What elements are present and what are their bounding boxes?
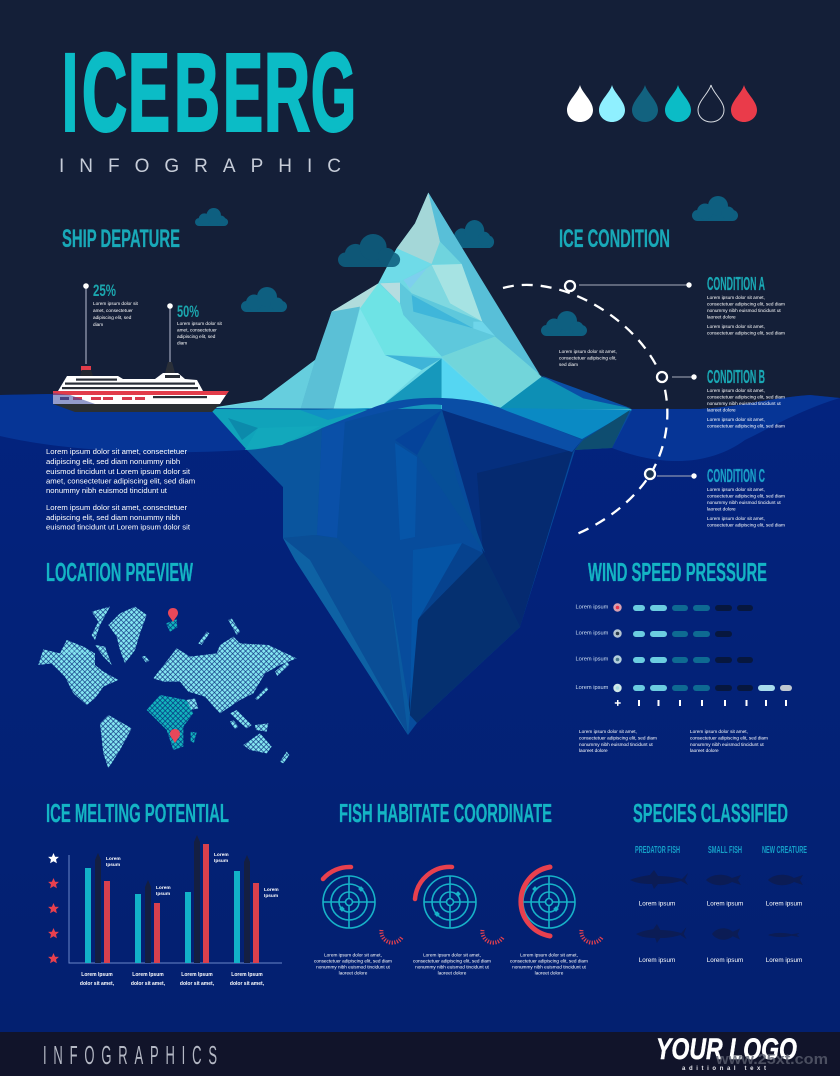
title: R [264,32,310,154]
column headings [635,845,807,856]
title: G [311,32,356,154]
bar group 4 [234,855,279,963]
x-axis labels: dolor sit amet, [80,981,115,987]
condition B: laoreet dolore [707,408,736,412]
radar 3 [510,867,602,976]
title: B [174,32,220,154]
fish labels: Lorem ipsum [639,900,675,908]
bar group 3: Lorem [214,852,229,858]
fish labels: Lorem ipsum [766,900,802,908]
icon: map pin north [168,608,178,622]
callout: 25%: amet, consectetuer [93,308,133,313]
bar group 2: Ipsum [156,891,170,897]
radar 1: consectetuer adipiscing elit, sed diam [314,958,392,964]
title: I [62,32,78,154]
condition B: nonummy nibh euismod tincidunt ut [707,401,781,406]
radar 3: nonummy nibh euismod tincidunt ut [512,964,587,970]
text block: left body copy: adipiscing elit, sed diam nonummy nibh [46,457,180,466]
condition A: Lorem ipsum dolor sit amet, [707,295,765,300]
footer bar [0,1032,840,1076]
text block: left body copy: Lorem ipsum dolor sit amet, consectetuer [46,503,187,512]
callout: 50%: amet, consectetuer [177,328,217,332]
clouds [195,196,738,336]
condition B: consectetuer adipiscing elit, sed diam [707,424,785,428]
heading: fish habitate coordinate: FISH HABITATE COORDINATE [339,798,552,828]
condition A: consectetuer adipiscing elit, sed diam [707,330,785,336]
dashed route with condition markers [503,281,697,536]
row 1: Lorem ipsum [576,604,609,610]
radar 3: Lorem ipsum dolor sit amet, [520,952,578,958]
radar 1 [314,867,402,976]
bar group 2 [135,880,171,963]
text block: wind note 1: nonummy nibh euismod tincidunt ut [579,742,653,747]
axis ticks [615,700,787,706]
x-axis labels: dolor sit amet, [230,981,265,987]
bar group 4: Lorem [264,887,279,893]
title: E [128,32,170,154]
condition A: Lorem ipsum dolor sit amet, [707,324,765,329]
condition A: CONDITION A [707,274,765,294]
subtitle: INFOGRAPHIC [59,156,341,177]
row 2 [576,629,732,638]
iceberg waterline facets [210,398,632,452]
world map [38,607,297,768]
bar group 4: Ipsum [264,893,278,899]
fish labels: Lorem ipsum [766,957,802,964]
heading: ice melting potential: ICE MELTING POTENTIAL [46,798,229,828]
bar group 3 [185,835,229,963]
title: E [223,32,263,154]
callout: 50%: adipiscing elit, sed [177,334,216,339]
bar chart: ice melting [48,835,282,987]
x-axis labels: Lorem Ipsum [181,972,213,978]
fish silhouettes [630,870,803,943]
x-axis labels: Lorem Ipsum [81,972,113,978]
text block: wind note 2: laoreet dolore [690,748,719,753]
condition C: Lorem ipsum dolor sit amet, [707,516,765,521]
condition A: laoreet dolore [707,314,736,320]
row 4 [576,684,792,692]
radar 2: nonummy nibh euismod tincidunt ut [415,964,490,970]
condition C: consectetuer adipiscing elit, sed diam [707,522,785,528]
condition C: nonummy nibh euismod tincidunt ut [707,500,781,505]
iceberg above water [210,193,632,410]
title: C [82,32,127,154]
watermark: www.25xt.com [715,1051,828,1068]
x-axis labels: Lorem Ipsum [231,972,263,978]
radar 1: laoreet dolore [339,970,368,976]
star scale [48,853,59,963]
text block: iceberg note: consectetuer adipiscing elit, [559,356,617,360]
condition A [707,274,785,336]
callout: 25%: Lorem ipsum dolor sit [93,301,139,306]
heading: ice condition: ICE CONDITION [559,225,670,253]
fish labels: Lorem ipsum [707,957,743,964]
radar 2: consectetuer adipiscing elit, sed diam [413,958,491,964]
text block: wind note 1: consectetuer adipiscing elit, sed diam [579,736,657,740]
footer title: INFOGRAPHICS [43,1041,217,1070]
row 1 [576,603,753,612]
callout: 50% [167,302,223,364]
condition B: consectetuer adipiscing elit, sed diam [707,394,785,400]
column headings: PREDATOR FISH [635,845,680,856]
callout: 25%: adipiscing elit, sed [93,315,132,320]
condition A: consectetuer adipiscing elit, sed diam [707,302,785,306]
radar 3: consectetuer adipiscing elit, sed diam [510,958,588,964]
condition A: nonummy nibh euismod tincidunt ut [707,308,781,313]
heading: ship departure: SHIP DEPATURE [62,225,180,253]
text block: wind note 1: laoreet dolore [579,748,608,753]
callout: 25%: 25% [93,281,116,300]
condition C [707,466,785,528]
column headings: SMALL FISH [708,845,742,856]
radar 1: nonummy nibh euismod tincidunt ut [316,964,391,970]
text block: left body copy: nonummy nibh euismod tincidunt ut [46,486,168,495]
callout: 50%: Lorem ipsum dolor sit [177,321,223,326]
ship with callouts [53,281,229,412]
wind speed chart [576,603,792,753]
row 4: Lorem ipsum [576,685,609,691]
condition B: Lorem ipsum dolor sit amet, [707,388,765,393]
iceberg below water [210,408,632,735]
text block: wind note 1: Lorem ipsum dolor sit amet, [579,729,637,734]
x-axis labels: dolor sit amet, [131,981,166,987]
bar group 1: Lorem [106,856,121,862]
logo: YOUR LOGO [656,1033,797,1066]
condition C: Lorem ipsum dolor sit amet, [707,487,765,492]
callout: 25% [83,281,139,364]
species table [630,845,807,964]
text block: wind note 2: consectetuer adipiscing elit, sed diam [690,736,768,740]
fish labels: Lorem ipsum [639,957,675,964]
text block: wind note 2: Lorem ipsum dolor sit amet, [690,729,748,734]
radar 3: laoreet dolore [535,970,564,976]
icon row: water drops [567,85,757,122]
text block: left body copy: euismod tincidunt ut Lorem ipsum dolor sit [46,522,191,532]
row 3: Lorem ipsum [576,656,609,662]
row 3 [576,655,753,664]
icon: cruise ship [53,362,229,412]
text block: iceberg note: Lorem ipsum dolor sit amet, [559,349,617,354]
heading: location preview: LOCATION PREVIEW [46,557,193,587]
icon: map pin south [170,729,180,743]
radar 1: Lorem ipsum dolor sit amet, [324,952,382,958]
fish labels: Lorem ipsum [707,900,743,908]
callout: 25%: diam [93,322,103,327]
text block: wind note 2: nonummy nibh euismod tincidunt ut [690,742,764,747]
condition C: consectetuer adipiscing elit, sed diam [707,494,785,498]
text block: left body copy: Lorem ipsum dolor sit amet, consectetuer [46,447,187,456]
text block: iceberg note: sed diam [559,362,578,367]
logo tagline: aditional text [682,1066,766,1072]
x-axis labels: dolor sit amet, [180,981,215,987]
clouds behind iceberg [449,220,494,248]
radar 2: laoreet dolore [438,970,467,976]
callout: 50%: diam [177,340,187,346]
bar group 1: Ipsum [106,862,120,868]
condition C: CONDITION C [707,466,765,486]
condition B: Lorem ipsum dolor sit amet, [707,417,765,422]
condition B: CONDITION B [707,367,765,387]
bar group 1 [85,853,121,963]
sea water [0,394,840,1032]
text block: left body copy: adipiscing elit, sed diam nonummy nibh [46,513,180,522]
text block: left body copy: amet, consectetuer adipiscing elit, sed diam [46,476,195,486]
iceberg [210,193,632,735]
radar 2: Lorem ipsum dolor sit amet, [423,952,481,958]
bar group 2: Lorem [156,885,171,891]
condition B [707,367,785,428]
text block: left body copy: euismod tincidunt ut Lorem ipsum dolor sit [46,467,191,476]
callout: 50%: 50% [177,302,199,321]
x-axis labels: Lorem Ipsum [132,972,164,978]
radar 2 [413,867,503,976]
condition C: laoreet dolore [707,506,736,512]
bar group 3: Ipsum [214,858,228,864]
row 2: Lorem ipsum [576,630,609,636]
